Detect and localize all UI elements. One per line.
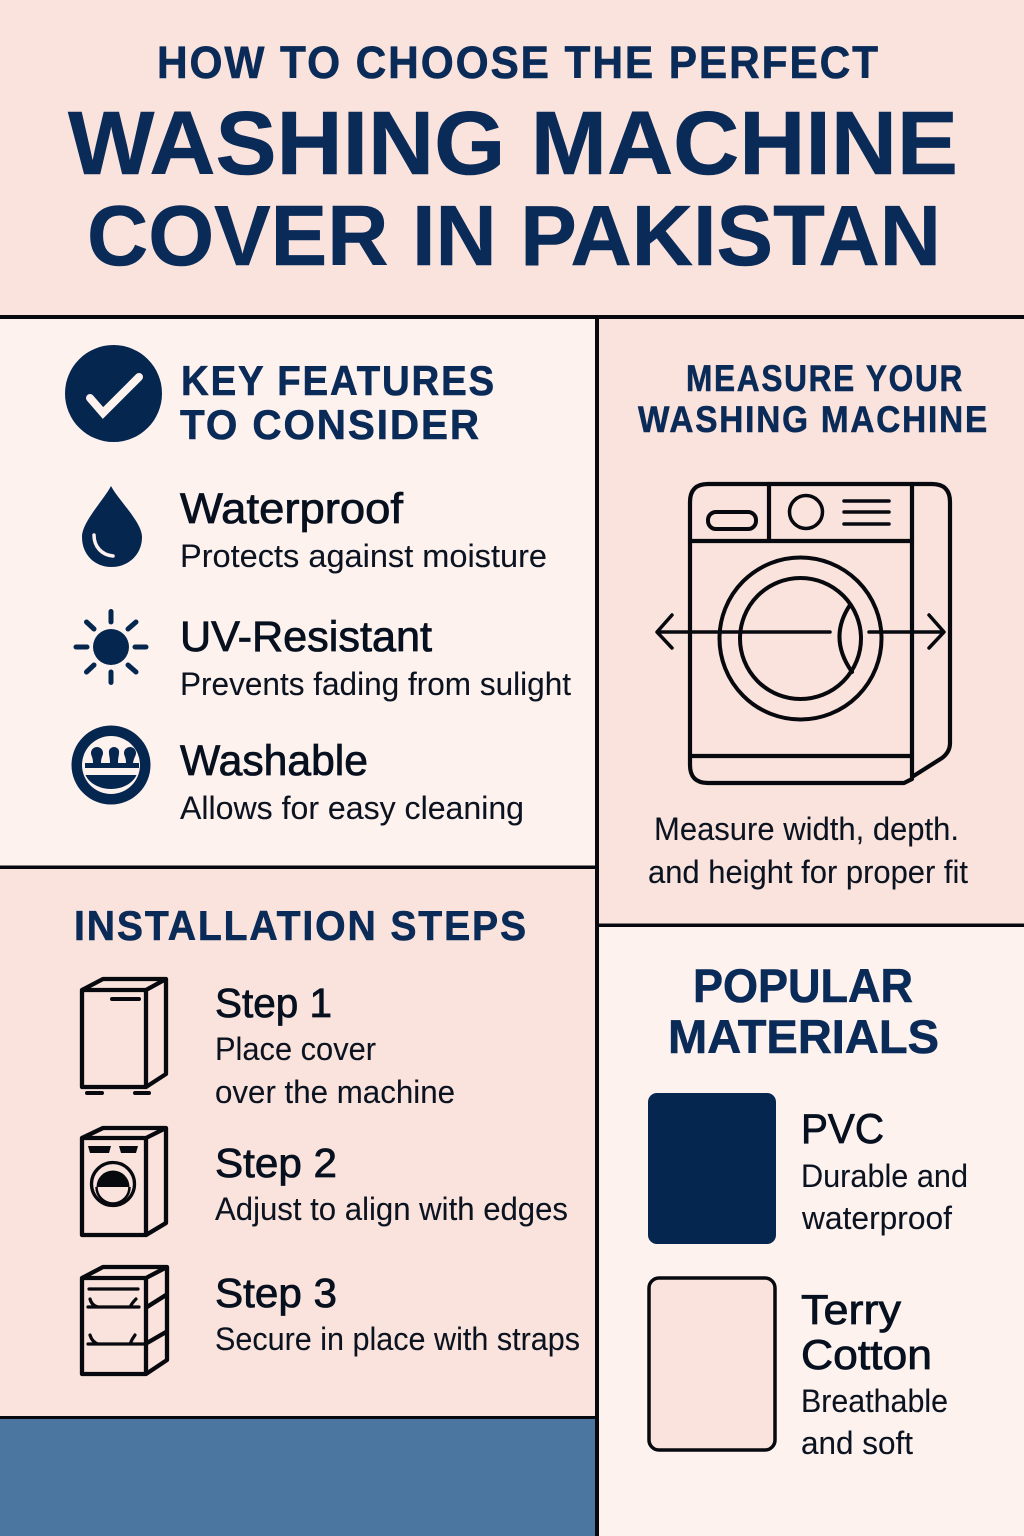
step 1 text: Place cover bbox=[215, 1031, 376, 1067]
step 1 text bbox=[215, 980, 455, 1110]
heading: key features: KEY FEATURES bbox=[181, 357, 496, 404]
icon: check mark badge bbox=[65, 345, 162, 442]
material: terry cotton: Terry bbox=[801, 1286, 901, 1333]
material: PVC bbox=[801, 1105, 968, 1236]
icon: sun bbox=[76, 612, 146, 682]
material: terry cotton bbox=[801, 1286, 948, 1461]
feature: UV-resistant: Prevents fading from sulight bbox=[180, 666, 571, 702]
heading: popular materials bbox=[668, 959, 939, 1063]
heading: measure bbox=[638, 358, 989, 440]
swatch: terry cotton bbox=[649, 1278, 775, 1450]
heading: measure: MEASURE YOUR bbox=[686, 358, 964, 399]
material: terry cotton: and soft bbox=[801, 1425, 913, 1461]
material: PVC: waterproof bbox=[801, 1200, 952, 1236]
feature: washable: Washable bbox=[180, 737, 368, 785]
feature: waterproof: Protects against moisture bbox=[180, 538, 547, 574]
panel: installation steps bbox=[0, 867, 597, 1419]
step 3 text bbox=[215, 1270, 580, 1357]
step 2 text: Adjust to align with edges bbox=[215, 1191, 568, 1227]
icon: covered machine bbox=[82, 979, 166, 1093]
panel: popular materials bbox=[597, 925, 1024, 1536]
blue footer block bbox=[0, 1418, 597, 1536]
feature: waterproof bbox=[180, 485, 547, 574]
heading: measure: WASHING MACHINE bbox=[638, 399, 989, 440]
feature: waterproof: Waterproof bbox=[180, 485, 404, 533]
material: PVC: PVC bbox=[801, 1105, 884, 1152]
heading: installation steps: INSTALLATION STEPS bbox=[74, 902, 528, 949]
step 2 text: Step 2 bbox=[215, 1140, 337, 1186]
feature: UV-resistant bbox=[180, 613, 571, 702]
caption: measure instructions: Measure width, depth. bbox=[654, 811, 959, 847]
step 1 text: Step 1 bbox=[215, 980, 332, 1026]
caption: measure instructions bbox=[648, 811, 968, 890]
title line 3: COVER IN PAKISTAN bbox=[87, 189, 941, 284]
heading: popular materials: POPULAR bbox=[693, 959, 913, 1012]
icon: washable bbox=[72, 726, 150, 804]
step 1 text: over the machine bbox=[215, 1074, 455, 1110]
heading: key features bbox=[180, 357, 496, 448]
swatch: PVC bbox=[648, 1093, 776, 1244]
heading: key features: TO CONSIDER bbox=[180, 401, 481, 448]
feature: UV-resistant: UV-Resistant bbox=[180, 613, 432, 661]
icon: machine with aligned cover bbox=[82, 1128, 166, 1235]
header: title block bbox=[0, 0, 1024, 317]
step 3 text: Secure in place with straps bbox=[215, 1321, 580, 1357]
icon: cover secured with straps bbox=[82, 1267, 167, 1374]
step 2 text bbox=[215, 1140, 568, 1227]
icon: washing machine with measuring arrows bbox=[657, 484, 950, 783]
title line 1: HOW TO CHOOSE THE PERFECT bbox=[157, 37, 880, 88]
panel: measure your washing machine bbox=[597, 317, 1024, 925]
material: PVC: Durable and bbox=[801, 1158, 968, 1194]
heading: popular materials: MATERIALS bbox=[668, 1010, 939, 1063]
feature: washable bbox=[180, 737, 524, 826]
material: terry cotton: Breathable bbox=[801, 1383, 948, 1419]
material: terry cotton: Cotton bbox=[801, 1331, 932, 1378]
title line 2: WASHING MACHINE bbox=[68, 94, 958, 194]
panel: key features bbox=[0, 317, 597, 867]
icon: water drop bbox=[82, 486, 142, 567]
caption: measure instructions: and height for proper fit bbox=[648, 854, 968, 890]
feature: washable: Allows for easy cleaning bbox=[180, 790, 524, 826]
step 3 text: Step 3 bbox=[215, 1270, 337, 1316]
